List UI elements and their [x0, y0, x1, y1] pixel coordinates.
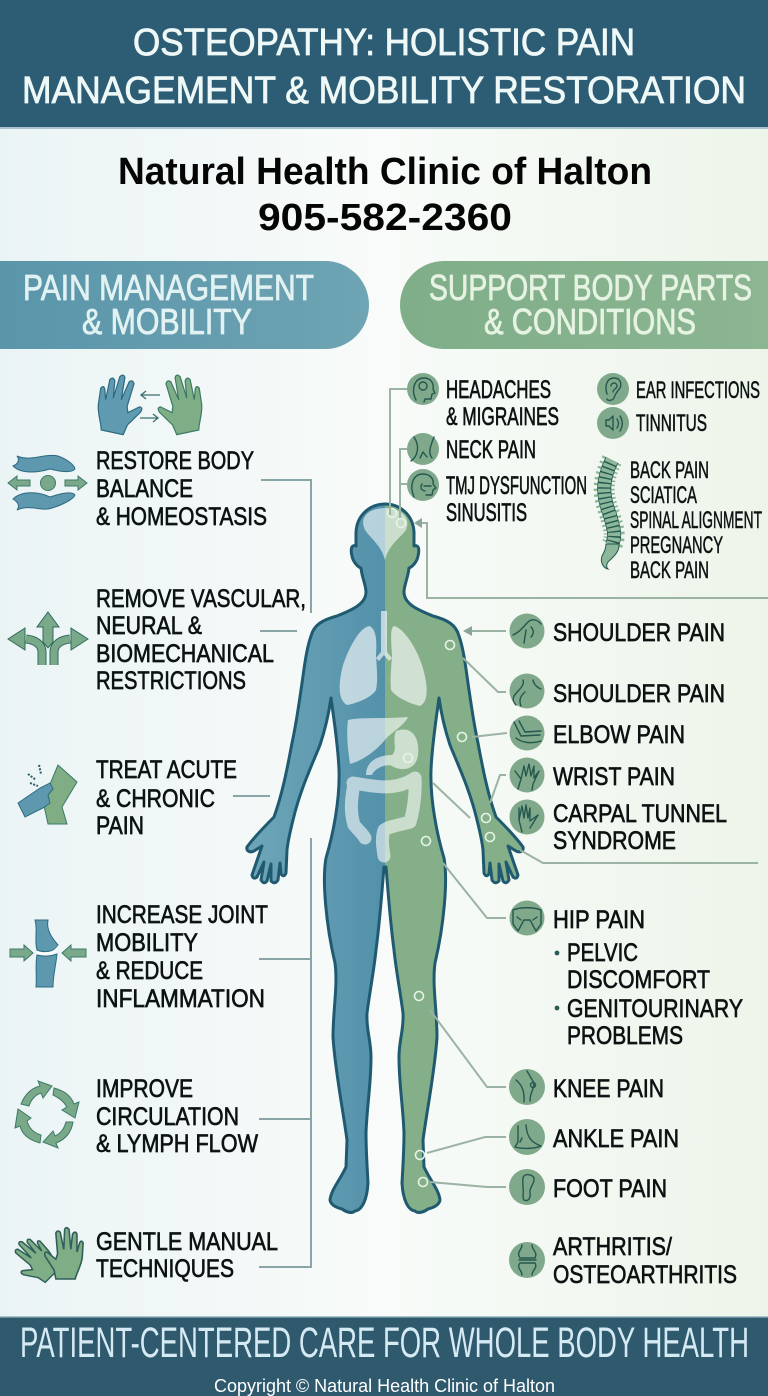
label: back conditions: BACK PAIN [630, 557, 709, 584]
label [96, 447, 267, 531]
label: PAIN [96, 812, 144, 840]
panel: left benefits [5, 447, 306, 1290]
label: tinnitus: TINNITUS [636, 410, 707, 437]
bullet list: PELVIC [567, 939, 638, 967]
copyright: Copyright © Natural Health Clinic of Halton [214, 1376, 555, 1396]
item: elbow pain: ELBOW PAIN [553, 721, 685, 749]
label: back conditions: SCIATICA [630, 482, 697, 509]
point markers [388, 508, 494, 1186]
label [96, 585, 306, 695]
footer banner [0, 1316, 768, 1396]
item: restore balance [8, 447, 267, 531]
icon: jaw [407, 469, 439, 501]
left heading pill [0, 261, 369, 349]
icon: branching arrows [8, 612, 88, 665]
item: shoulder pain second [510, 674, 725, 708]
label: neck pain: NECK PAIN [446, 436, 536, 464]
item: arthritis: ARTHRITIS/ [553, 1233, 672, 1261]
title banner [0, 0, 768, 129]
icon: headache [407, 373, 439, 405]
label: & CHRONIC [96, 785, 215, 813]
label: MOBILITY [96, 929, 198, 957]
bullet list [555, 939, 743, 1050]
item: wrist pain: WRIST PAIN [553, 763, 675, 791]
item: hip pain and pelvic conditions: HIP PAIN [553, 906, 645, 934]
item: carpal tunnel: SYNDROME [553, 827, 676, 855]
left connector lines [233, 480, 311, 1267]
label: & HOMEOSTASIS [96, 503, 267, 531]
item: foot pain: FOOT PAIN [553, 1175, 667, 1203]
item: knee pain: KNEE PAIN [553, 1075, 664, 1103]
right heading pill [400, 261, 768, 349]
label [96, 1228, 278, 1283]
organ: lungs and trachea [340, 611, 427, 706]
bullet list: PROBLEMS [567, 1022, 683, 1050]
icon: tinnitus [597, 407, 629, 439]
right connector lines [390, 389, 768, 1187]
organ: brain [363, 508, 407, 560]
item: hip pain and pelvic conditions [510, 900, 743, 1050]
label: TMJ and sinusitis: TMJ DYSFUNCTION [446, 472, 587, 500]
left heading pill: PAIN MANAGEMENT [23, 267, 314, 308]
icon: knee joint [10, 920, 86, 987]
item: ankle pain [509, 1119, 679, 1155]
icon: ear [597, 373, 629, 405]
item: shoulder pain: SHOULDER PAIN [553, 619, 725, 647]
label: RESTRICTIONS [96, 667, 246, 695]
icon: mirrored hands [92, 371, 208, 437]
title line 1: OSTEOPATHY: HOLISTIC PAIN [133, 22, 635, 64]
item: carpal tunnel [510, 800, 727, 855]
label: BALANCE [96, 475, 193, 503]
organ: intestines [351, 778, 415, 856]
phone number: 905-582-2360 [258, 197, 512, 239]
label [96, 901, 268, 1013]
item: knee pain [509, 1069, 664, 1105]
icon: neck [407, 433, 439, 465]
label: GENTLE MANUAL [96, 1228, 278, 1256]
label [96, 1075, 258, 1158]
label: back conditions: BACK PAIN [630, 457, 709, 484]
label [96, 756, 237, 840]
item: shoulder pain second: SHOULDER PAIN [553, 680, 725, 708]
item: arthritis [509, 1233, 737, 1289]
label: IMPROVE [96, 1075, 193, 1103]
label: INCREASE JOINT [96, 901, 268, 929]
panel: body part conditions [509, 614, 743, 1289]
label: TREAT ACUTE [96, 756, 237, 784]
item: foot pain [509, 1169, 667, 1205]
label: REMOVE VASCULAR, [96, 585, 306, 613]
icon: circular arrows [15, 1081, 79, 1148]
clinic name and phone [118, 151, 652, 239]
bullet list: DISCOMFORT [567, 966, 710, 994]
item: arthritis: OSTEOARTHRITIS [553, 1261, 737, 1289]
label: TECHNIQUES [96, 1255, 234, 1283]
right heading pill: & CONDITIONS [484, 301, 696, 342]
item: joint mobility [10, 901, 268, 1013]
item: wrist pain [510, 758, 675, 792]
label: NEURAL & [96, 612, 202, 640]
item: remove restrictions [8, 585, 306, 695]
item: gentle techniques [5, 1228, 278, 1290]
label: TMJ and sinusitis: SINUSITIS [446, 499, 527, 527]
icon: hand on knee [18, 765, 77, 824]
body figure [247, 504, 523, 1212]
item: ankle pain: ANKLE PAIN [553, 1125, 679, 1153]
label: CIRCULATION [96, 1103, 239, 1131]
clinic name and phone: Natural Health Clinic of Halton [118, 151, 652, 193]
label: & LYMPH FLOW [96, 1130, 258, 1158]
label: back conditions [630, 457, 762, 584]
label: RESTORE BODY [96, 447, 254, 475]
item: treat pain [18, 756, 237, 840]
left heading pill: & MOBILITY [82, 301, 252, 342]
label: & REDUCE [96, 957, 203, 985]
icon: balance hands [8, 455, 87, 510]
item: elbow pain [510, 716, 685, 750]
icon: spine [601, 460, 619, 569]
icon: gentle hands [5, 1228, 83, 1290]
label: headaches [446, 376, 559, 431]
label: headaches: HEADACHES [446, 376, 551, 404]
label: TMJ and sinusitis [446, 472, 587, 527]
label: BIOMECHANICAL [96, 640, 274, 668]
item: shoulder pain [510, 614, 725, 648]
organ: liver and stomach [347, 717, 418, 775]
panel: head and spine conditions [407, 373, 762, 584]
item: carpal tunnel: CARPAL TUNNEL [553, 800, 727, 828]
item: circulation [15, 1075, 258, 1158]
label: headaches: & MIGRAINES [446, 403, 559, 431]
label: INFLAMMATION [96, 985, 265, 1013]
